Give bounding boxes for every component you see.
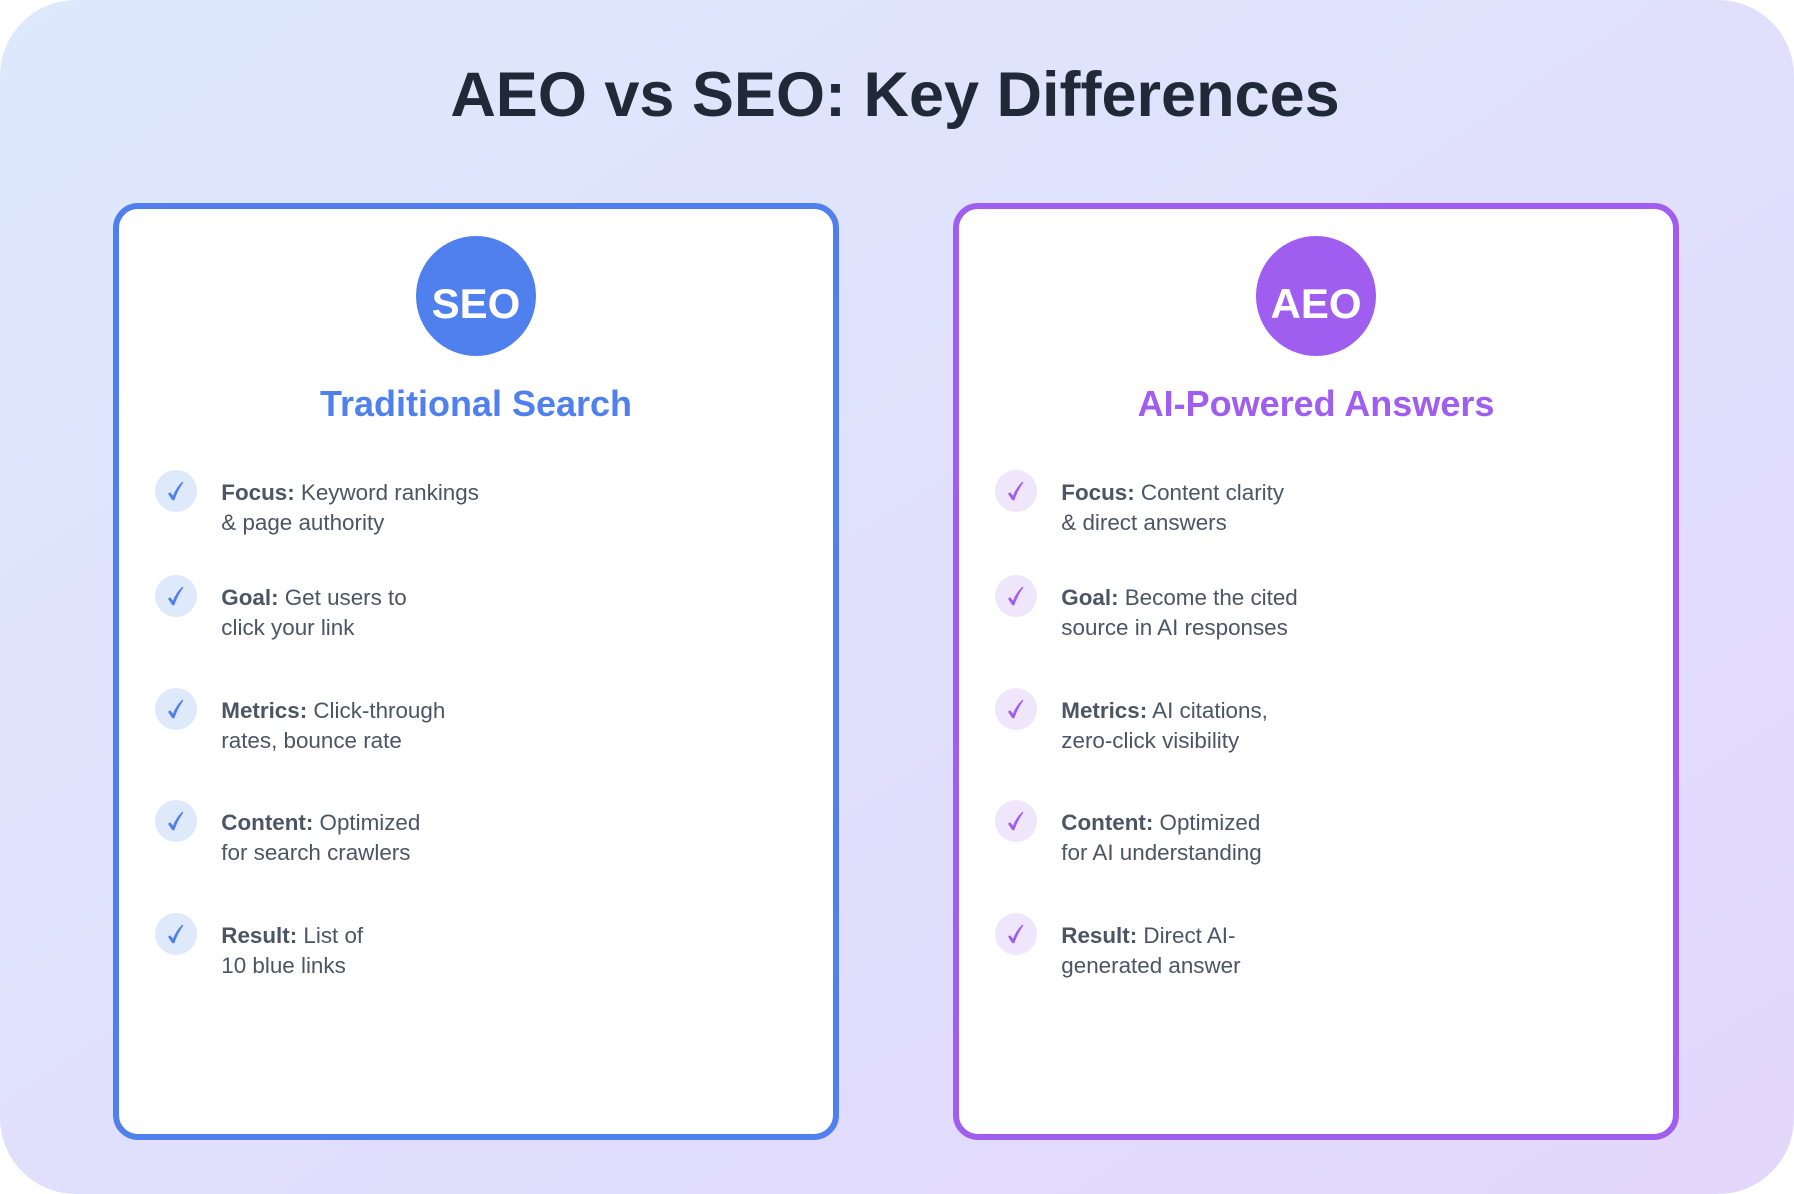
- item: focus: [995, 470, 1284, 535]
- heading: Traditional Search: Traditional Search: [320, 383, 632, 424]
- item: result: Result: Direct AI-: [1061, 923, 1235, 948]
- item: focus: Focus: Content clarity: [1061, 480, 1284, 505]
- item: goal: click your link: [221, 615, 354, 640]
- panel: SEO: [113, 203, 839, 1140]
- item: goal: source in AI responses: [1061, 615, 1288, 640]
- item: content: [995, 800, 1262, 865]
- item: result: [155, 913, 364, 978]
- item: result: generated answer: [1061, 953, 1241, 978]
- item: metrics: [995, 688, 1268, 753]
- item: goal: Goal: Get users to: [221, 585, 407, 610]
- item: focus: Focus: Keyword rankings: [221, 480, 479, 505]
- item: metrics: zero-click visibility: [1061, 728, 1239, 753]
- item: goal: [995, 575, 1298, 640]
- item: content: Content: Optimized: [1061, 810, 1260, 835]
- item: content: [155, 800, 420, 865]
- icon: SEO badge: [416, 236, 536, 356]
- item: result: Result: List of: [221, 923, 363, 948]
- item: metrics: rates, bounce rate: [221, 728, 402, 753]
- item: metrics: Metrics: Click-through: [221, 698, 445, 723]
- panel: AEO: [953, 203, 1679, 1140]
- item: content: Content: Optimized: [221, 810, 420, 835]
- icon: AEO badge: [1256, 236, 1376, 356]
- item: focus: [155, 470, 479, 535]
- item: content: for AI understanding: [1061, 840, 1262, 865]
- item: focus: & page authority: [221, 510, 384, 535]
- item: metrics: [155, 688, 445, 753]
- item: content: for search crawlers: [221, 840, 410, 865]
- title: AEO vs SEO: Key Differences: [450, 60, 1340, 130]
- item: goal: Goal: Become the cited: [1061, 585, 1298, 610]
- heading: AI-Powered Answers: AI-Powered Answers: [1138, 383, 1494, 424]
- item: goal: [155, 575, 407, 640]
- item: focus: & direct answers: [1061, 510, 1227, 535]
- item: result: [995, 913, 1241, 978]
- icon: SEO badge: SEO: [432, 280, 520, 327]
- icon: AEO badge: AEO: [1270, 280, 1362, 327]
- item: result: 10 blue links: [221, 953, 346, 978]
- item: metrics: Metrics: AI citations,: [1061, 698, 1268, 723]
